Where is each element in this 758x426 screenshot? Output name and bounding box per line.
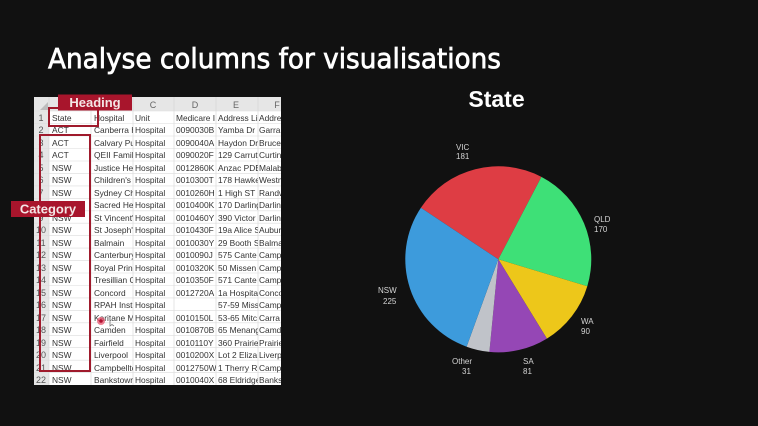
- heading outline box: [49, 108, 98, 126]
- label: Category: Category: [20, 202, 77, 216]
- spreadsheet: Hospital: [135, 175, 165, 185]
- spreadsheet: NSW: [52, 250, 72, 260]
- spreadsheet: 8: [38, 200, 44, 210]
- spreadsheet: 53-65 Mitc: [218, 313, 257, 323]
- spreadsheet: St Joseph's: [94, 225, 137, 235]
- spreadsheet: Yamba Dr: [218, 125, 255, 135]
- spreadsheet: 0012750W: [176, 363, 217, 373]
- spreadsheet: 0090040A: [176, 138, 215, 148]
- label: NSW: NSW: [378, 286, 397, 295]
- spreadsheet: 50 Missen: [218, 263, 257, 273]
- spreadsheet: Tresillian C: [94, 275, 136, 285]
- spreadsheet: 6: [38, 175, 44, 185]
- spreadsheet: NSW: [52, 238, 72, 248]
- spreadsheet: NSW: [52, 275, 72, 285]
- spreadsheet: 15: [36, 288, 46, 298]
- spreadsheet: NSW: [52, 325, 72, 335]
- slice: Other: [467, 259, 498, 352]
- spreadsheet: F: [274, 100, 280, 110]
- spreadsheet: 29 Booth S: [218, 238, 260, 248]
- spreadsheet: QEII Family: [94, 150, 139, 160]
- spreadsheet: Liverp: [259, 350, 282, 360]
- spreadsheet: 22: [36, 375, 46, 385]
- spreadsheet: Fairfield: [94, 338, 124, 348]
- spreadsheet: 18: [36, 325, 46, 335]
- spreadsheet: Hospital: [135, 125, 165, 135]
- label: VIC: 181: [456, 152, 470, 161]
- slice: SA: [489, 259, 547, 352]
- spreadsheet: Conco: [259, 288, 284, 298]
- spreadsheet: Canterbury: [94, 250, 136, 260]
- spreadsheet: NSW: [52, 188, 72, 198]
- spreadsheet: Camp: [259, 263, 282, 273]
- spreadsheet: 571 Cante: [218, 275, 257, 285]
- icon: cursor pointer: [97, 317, 114, 326]
- spreadsheet: 178 Hawke: [218, 175, 260, 185]
- spreadsheet: Calvary Pu: [94, 138, 135, 148]
- label: VIC: VIC: [456, 143, 469, 152]
- spreadsheet: Sydney Chi: [94, 188, 137, 198]
- spreadsheet: Malab: [259, 163, 282, 173]
- spreadsheet: 0010870B: [176, 325, 215, 335]
- spreadsheet: 0010040X: [176, 375, 215, 385]
- spreadsheet: Hospital: [135, 313, 165, 323]
- spreadsheet: Hospital: [135, 225, 165, 235]
- spreadsheet: Hospital: [135, 363, 165, 373]
- spreadsheet: 0010300T: [176, 175, 214, 185]
- spreadsheet: 0012720A: [176, 288, 215, 298]
- spreadsheet: Randw: [259, 188, 286, 198]
- label: WA: 90: [581, 327, 590, 336]
- spreadsheet: Hospital: [135, 238, 165, 248]
- spreadsheet: Carra: [259, 313, 280, 323]
- spreadsheet: Curtin: [259, 150, 282, 160]
- spreadsheet: 0010460Y: [176, 213, 215, 223]
- spreadsheet: Hospital: [135, 300, 165, 310]
- spreadsheet: 0012860K: [176, 163, 215, 173]
- spreadsheet: Darlin: [259, 200, 281, 210]
- spreadsheet: Medicare I: [176, 113, 215, 123]
- spreadsheet: 0010430F: [176, 225, 214, 235]
- label: QLD: QLD: [594, 215, 610, 224]
- label: SA: SA: [523, 357, 534, 366]
- spreadsheet: Bruce: [259, 138, 281, 148]
- spreadsheet: 0010400K: [176, 200, 215, 210]
- spreadsheet: D: [192, 100, 199, 110]
- spreadsheet: NSW: [52, 200, 72, 210]
- spreadsheet: Camp: [259, 363, 282, 373]
- spreadsheet: ACT: [52, 125, 69, 135]
- spreadsheet: 0010150L: [176, 313, 214, 323]
- spreadsheet: 19: [36, 338, 46, 348]
- spreadsheet: 0010110Y: [176, 338, 214, 348]
- spreadsheet: 575 Cante: [218, 250, 257, 260]
- spreadsheet: ACT: [52, 150, 69, 160]
- spreadsheet: Hospital: [135, 138, 165, 148]
- spreadsheet: 68 Eldridge: [218, 375, 261, 385]
- spreadsheet: Hospital: [135, 188, 165, 198]
- spreadsheet: Camden: [94, 325, 126, 335]
- label: NSW: 225: [383, 297, 397, 306]
- spreadsheet: Camd: [259, 325, 282, 335]
- spreadsheet: Royal Princ: [94, 263, 137, 273]
- spreadsheet: 16: [36, 300, 46, 310]
- spreadsheet: Hospital: [135, 325, 165, 335]
- spreadsheet: 0010320K: [176, 263, 215, 273]
- spreadsheet: Children's: [94, 175, 131, 185]
- spreadsheet: Hospital: [135, 150, 165, 160]
- spreadsheet: Balmain: [94, 238, 125, 248]
- spreadsheet: 0010200X: [176, 350, 215, 360]
- spreadsheet: 13: [36, 263, 46, 273]
- spreadsheet: NSW: [52, 350, 72, 360]
- spreadsheet: Anzac PDE: [218, 163, 261, 173]
- spreadsheet: 0010260H: [176, 188, 215, 198]
- spreadsheet: 3: [38, 138, 44, 148]
- spreadsheet: Balma: [259, 238, 283, 248]
- spreadsheet: NSW: [52, 175, 72, 185]
- spreadsheet: Hospital: [135, 275, 165, 285]
- spreadsheet: Camp: [259, 300, 282, 310]
- spreadsheet: ACT: [52, 138, 69, 148]
- slice: VIC: [421, 166, 541, 259]
- spreadsheet: NSW: [52, 263, 72, 273]
- label: WA: WA: [581, 317, 594, 326]
- spreadsheet: Hospital: [135, 288, 165, 298]
- spreadsheet: C: [150, 100, 157, 110]
- spreadsheet: NSW: [52, 363, 72, 373]
- spreadsheet: St Vincent': [94, 213, 134, 223]
- spreadsheet: 65 Menang: [218, 325, 260, 335]
- spreadsheet: 170 Darling: [218, 200, 261, 210]
- spreadsheet: NSW: [52, 300, 72, 310]
- spreadsheet: NSW: [52, 375, 72, 385]
- spreadsheet: 129 Carrut: [218, 150, 258, 160]
- spreadsheet: 0010350F: [176, 275, 214, 285]
- spreadsheet: 2: [38, 125, 44, 135]
- spreadsheet: [34, 97, 286, 385]
- spreadsheet: 7: [38, 188, 44, 198]
- slice: NSW: [405, 208, 498, 347]
- spreadsheet: Hospital: [135, 350, 165, 360]
- spreadsheet: Hospital: [135, 338, 165, 348]
- spreadsheet: Garra: [259, 125, 281, 135]
- spreadsheet: Justice Hea: [94, 163, 138, 173]
- spreadsheet: 0010090J: [176, 250, 213, 260]
- label: Other: Other: [452, 357, 472, 366]
- spreadsheet: E: [233, 100, 239, 110]
- spreadsheet: Canberra H: [94, 125, 137, 135]
- spreadsheet: Haydon Dr: [218, 138, 258, 148]
- spreadsheet: Darlin: [259, 213, 281, 223]
- spreadsheet: Banks: [259, 375, 282, 385]
- spreadsheet: 17: [36, 313, 46, 323]
- label: SA: 81: [523, 367, 532, 376]
- spreadsheet: Hospital: [135, 263, 165, 273]
- spreadsheet: Hospital: [135, 250, 165, 260]
- spreadsheet: 19a Alice S: [218, 225, 260, 235]
- spreadsheet: Bankstown: [94, 375, 135, 385]
- spreadsheet: 5: [38, 163, 44, 173]
- label: QLD: 170: [594, 225, 608, 234]
- spreadsheet: Unit: [135, 113, 151, 123]
- spreadsheet: 360 Prairie: [218, 338, 259, 348]
- spreadsheet: 12: [36, 250, 46, 260]
- spreadsheet: Camp: [259, 250, 282, 260]
- spreadsheet: Prairie: [259, 338, 284, 348]
- spreadsheet: Aubur: [259, 225, 282, 235]
- spreadsheet: NSW: [52, 313, 72, 323]
- spreadsheet: 21: [36, 363, 46, 373]
- spreadsheet: 390 Victor: [218, 213, 256, 223]
- spreadsheet: 1 High ST: [218, 188, 255, 198]
- spreadsheet: Hospital: [135, 163, 165, 173]
- spreadsheet: NSW: [52, 338, 72, 348]
- pie chart: State: [405, 166, 591, 352]
- spreadsheet: 1: [38, 113, 44, 123]
- spreadsheet: Addre: [259, 113, 282, 123]
- spreadsheet: NSW: [52, 288, 72, 298]
- spreadsheet: Westm: [259, 175, 285, 185]
- label: Heading: Heading: [69, 95, 121, 110]
- spreadsheet: 4: [38, 150, 44, 160]
- spreadsheet: 0090030B: [176, 125, 215, 135]
- spreadsheet: 0010030Y: [176, 238, 215, 248]
- spreadsheet: 10: [36, 225, 46, 235]
- slice: QLD: [498, 177, 591, 286]
- spreadsheet: Campbellto: [94, 363, 137, 373]
- spreadsheet: Sacred Hea: [94, 200, 139, 210]
- spreadsheet: 14: [36, 275, 46, 285]
- spreadsheet: Concord: [94, 288, 126, 298]
- spreadsheet: 9: [38, 213, 44, 223]
- spreadsheet: 20: [36, 350, 46, 360]
- spreadsheet: NSW: [52, 225, 72, 235]
- label: Heading: [58, 94, 132, 110]
- spreadsheet: Karitane M: [94, 313, 135, 323]
- spreadsheet: Hospital: [135, 213, 165, 223]
- spreadsheet: RPAH Insti: [94, 300, 134, 310]
- label: Other: 31: [462, 367, 471, 376]
- spreadsheet: Camp: [259, 275, 282, 285]
- chart title: State: [468, 86, 525, 112]
- title: Analyse columns for visualisations: [48, 44, 501, 75]
- spreadsheet: NSW: [52, 163, 72, 173]
- spreadsheet: Liverpool: [94, 350, 128, 360]
- spreadsheet: Hospital: [135, 375, 165, 385]
- spreadsheet: Hospital: [94, 113, 124, 123]
- category outline box: [40, 135, 90, 371]
- spreadsheet: Address Li: [218, 113, 258, 123]
- spreadsheet: State: [52, 113, 72, 123]
- spreadsheet: 0090020F: [176, 150, 214, 160]
- spreadsheet: Hospital: [135, 200, 165, 210]
- slice: WA: [498, 259, 587, 339]
- spreadsheet: 1 Therry R: [218, 363, 257, 373]
- spreadsheet: 1a Hospita: [218, 288, 258, 298]
- spreadsheet: 11: [36, 238, 46, 248]
- spreadsheet: 57-59 Miss: [218, 300, 259, 310]
- spreadsheet: Lot 2 Eliza: [218, 350, 257, 360]
- spreadsheet: NSW: [52, 213, 72, 223]
